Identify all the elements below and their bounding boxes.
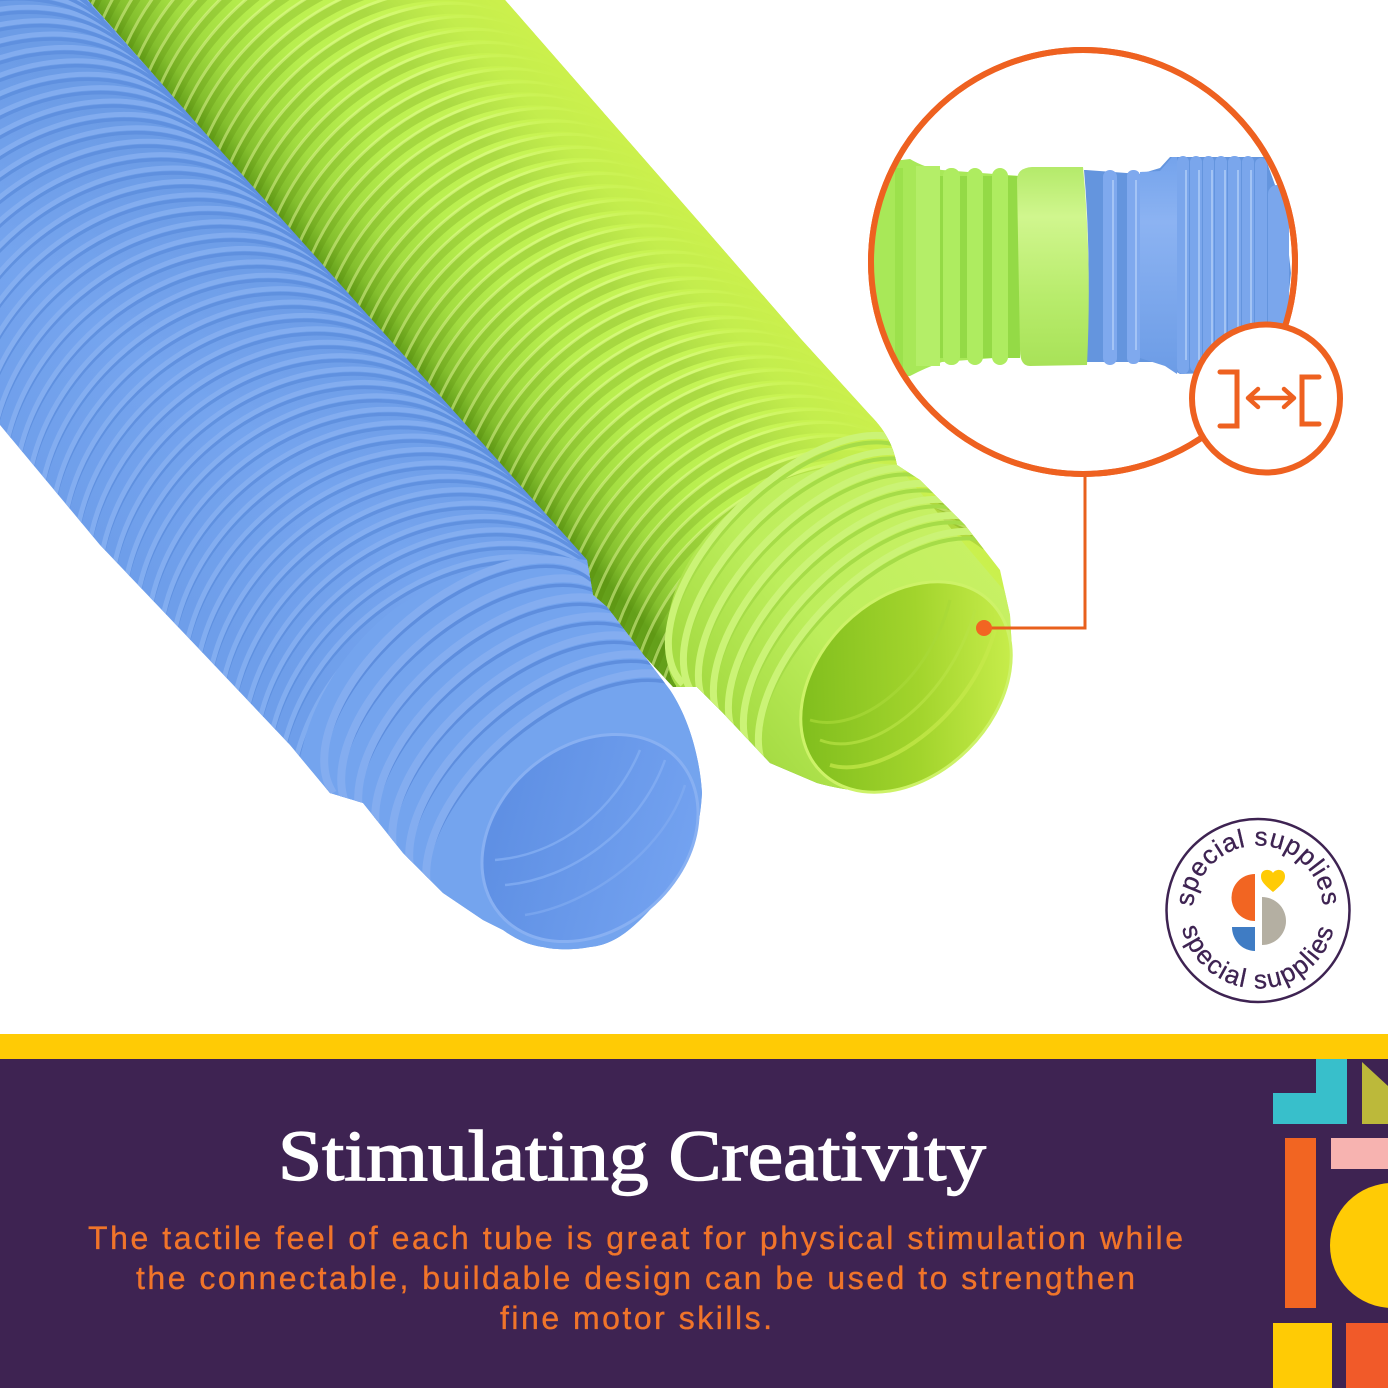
icon: expand and connect badge xyxy=(1192,324,1340,472)
text block: description xyxy=(88,1220,1183,1336)
text block: description: the connectable, buildable design can be used to strengthen xyxy=(136,1260,1135,1296)
logo: special supplies badge: special supplies xyxy=(1182,926,1333,989)
photo: green pop tube xyxy=(88,0,1013,794)
text block: description: The tactile feel of each tube is great for physical stimulation while xyxy=(88,1220,1183,1256)
logo: special supplies badge xyxy=(1165,818,1351,1004)
panel: bottom banner xyxy=(0,1034,1388,1388)
photo: blue pop tube xyxy=(0,0,740,984)
heading: Stimulating Creativity xyxy=(278,1116,986,1196)
text block: description: fine motor skills. xyxy=(500,1300,772,1336)
logo: special supplies badge: special supplies xyxy=(1180,828,1336,906)
callout: zoomed connector circle xyxy=(860,50,1295,474)
decorative geometric shapes xyxy=(1273,1059,1388,1388)
callout: leader line with dot xyxy=(976,476,1085,636)
inset photo: connected tubes xyxy=(860,156,1291,380)
